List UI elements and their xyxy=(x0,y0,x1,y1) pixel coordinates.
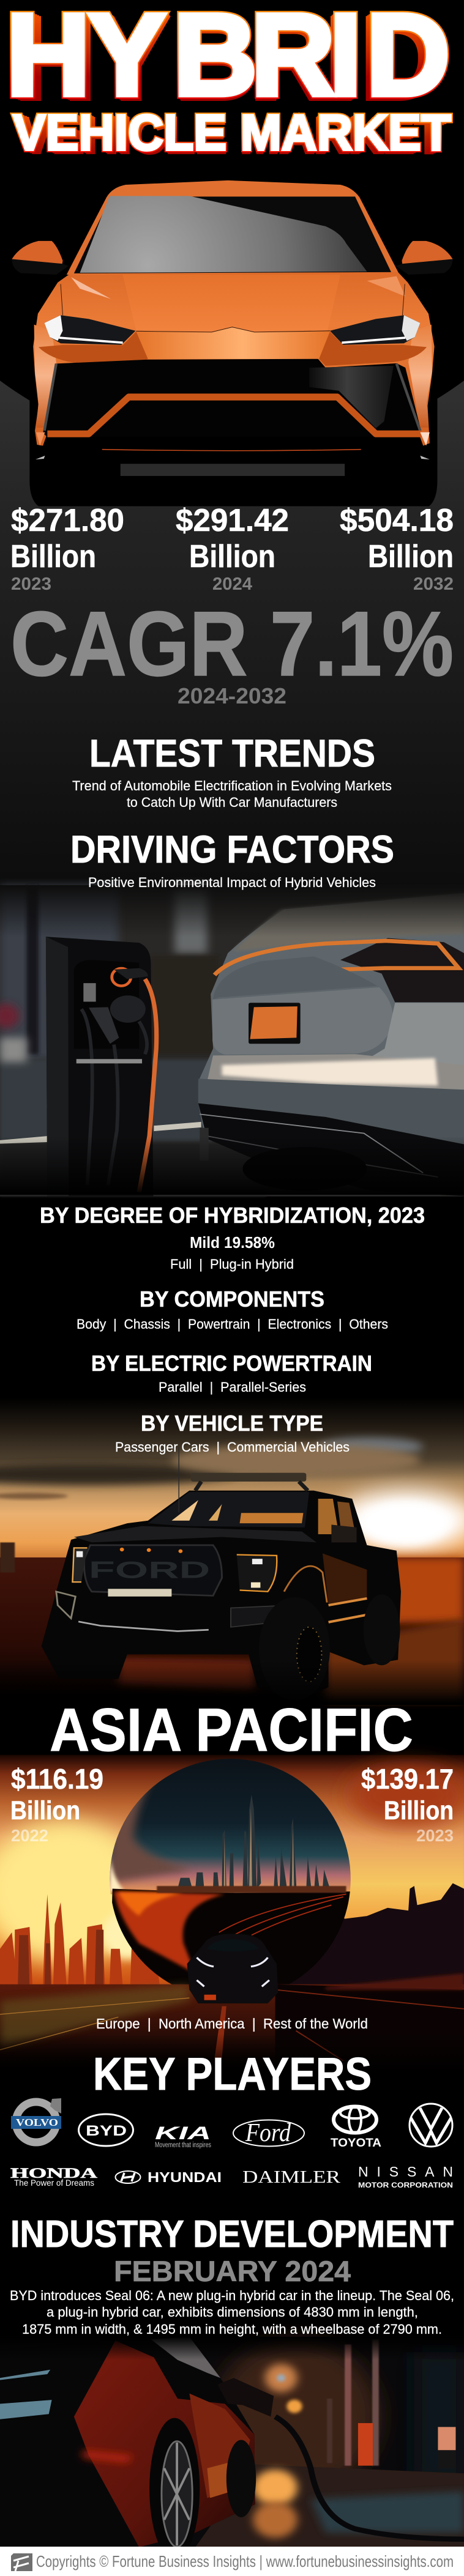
stat: 2024 market size: $291.42 xyxy=(176,503,289,538)
stat: 2023 market size: Billion xyxy=(10,539,96,574)
heading: by electric powertrain: BY ELECTRIC POWERTRAIN xyxy=(91,1351,372,1376)
photo: hybrid car at charging station xyxy=(0,885,464,1197)
logo: Volvo: VOLVO xyxy=(16,2117,58,2128)
stat: 2032 market size: 2032 xyxy=(413,574,454,594)
logo: Honda xyxy=(10,2166,98,2188)
stat: 2024 market size xyxy=(176,503,289,594)
logo: Kia: Movement that inspires xyxy=(155,2142,211,2149)
logo: Daimler: DAIMLER xyxy=(242,2167,341,2187)
text: other regions: Europe | North America | Rest of the World xyxy=(96,2016,368,2032)
heading: by components: BY COMPONENTS xyxy=(140,1286,324,1312)
text: driving factors body: Positive Environmental Impact of Hybrid Vehicles xyxy=(88,875,376,890)
logo: BYD: BYD xyxy=(86,2123,127,2139)
logo: Toyota xyxy=(331,2106,381,2150)
text: mild share: Mild 19.58% xyxy=(190,1233,275,1252)
stat: Asia Pacific 2022 xyxy=(10,1763,103,1845)
title: VEHICLE MARKET: VEHICLE MARKET xyxy=(13,104,451,161)
stat: Asia Pacific 2022: 2022 xyxy=(11,1826,48,1845)
heading: key players: KEY PLAYERS xyxy=(93,2048,372,2099)
logo: Honda: The Power of Dreams xyxy=(14,2178,94,2188)
logo: Hyundai xyxy=(115,2169,222,2185)
stat: 2023 market size: 2023 xyxy=(11,574,51,594)
logo: Kia xyxy=(155,2123,211,2149)
logo: Nissan xyxy=(358,2164,453,2189)
text: development details: a plug-in hybrid car, exhibits dimensions of 4830 mm in length, xyxy=(47,2304,418,2320)
stat: Asia Pacific 2023: Billion xyxy=(384,1796,454,1825)
title: VEHICLE MARKET: VEHICLE MARKET xyxy=(13,104,451,161)
logo: BYD xyxy=(78,2114,133,2146)
logo: Toyota: TOYOTA xyxy=(331,2137,381,2150)
stat: 2032 market size: Billion xyxy=(368,539,454,574)
stat: 2023 market size: $271.80 xyxy=(11,503,124,538)
logo: Ford: Ford xyxy=(245,2119,291,2147)
text: development details: 1875 mm in width, & 1495 mm in height, with a wheelbase of 2790 mm. xyxy=(22,2322,442,2337)
title: VEHICLE MARKET: VEHICLE MARKET xyxy=(21,108,443,164)
photo: pickup truck at sunset xyxy=(0,1398,464,1705)
stat: 2032 market size xyxy=(340,503,454,594)
text: other hybridization types: Full | Plug-in Hybrid xyxy=(170,1256,294,1272)
stat: 2023 market size xyxy=(10,503,124,594)
photo: pickup truck at sunset: FORD xyxy=(89,1556,210,1583)
stat: Asia Pacific 2023: $139.17 xyxy=(361,1763,454,1795)
logo: Honda: HONDA xyxy=(10,2166,98,2181)
text: latest trends body: Trend of Automobile Electrification in Evolving Markets xyxy=(72,778,392,793)
heading: development date: FEBRUARY 2024 xyxy=(114,2255,351,2287)
title: VEHICLE MARKET: VEHICLE MARKET xyxy=(18,107,446,163)
heading: Asia Pacific: ASIA PACIFIC xyxy=(50,1696,413,1764)
text: powertrain list: Parallel | Parallel-Series xyxy=(159,1379,306,1395)
logo: Kia: KIA xyxy=(155,2123,211,2144)
text: latest trends body xyxy=(72,778,392,810)
heading: latest trends: LATEST TRENDS xyxy=(89,732,375,775)
text: components list: Body | Chassis | Powertrain | Electronics | Others xyxy=(77,1316,388,1332)
title: VEHICLE MARKET: VEHICLE MARKET xyxy=(13,104,451,161)
illustration: orange SUV front view xyxy=(12,180,453,507)
logo: Nissan: MOTOR CORPORATION xyxy=(358,2181,453,2189)
text: development details: BYD introduces Seal 06: A new plug-in hybrid car in the lineup. The Seal 06, xyxy=(10,2288,454,2303)
stat: Asia Pacific 2022: $116.19 xyxy=(11,1763,103,1795)
stat: 2024 market size: 2024 xyxy=(212,574,252,594)
panel: dark gradient backdrop with black arc xyxy=(0,0,464,893)
text: development details xyxy=(10,2288,454,2337)
text: latest trends body: to Catch Up With Car Manufacturers xyxy=(127,795,337,810)
text: vehicle type list: Passenger Cars | Commercial Vehicles xyxy=(115,1439,350,1455)
stat: Asia Pacific 2023: 2023 xyxy=(416,1826,454,1845)
heading: driving factors: DRIVING FACTORS xyxy=(70,828,394,871)
footer: copyright bar xyxy=(0,2547,464,2576)
logo: Hyundai: HYUNDAI xyxy=(148,2169,222,2185)
title: VEHICLE MARKET: VEHICLE MARKET xyxy=(16,106,448,162)
logo: Volkswagen xyxy=(410,2104,452,2147)
stat: CAGR period: 2024-2032 xyxy=(178,683,286,708)
photo: futuristic city planet at sunset xyxy=(0,1755,464,2074)
logo: Nissan: NISSAN xyxy=(358,2164,453,2180)
heading: by degree of hybridization: BY DEGREE OF HYBRIDIZATION, 2023 xyxy=(40,1203,425,1228)
icon: Fortune Business Insights logo xyxy=(11,2553,32,2571)
photo: red car refuelling at night xyxy=(0,2337,464,2560)
stat: 2024 market size: Billion xyxy=(189,539,275,574)
stat: Asia Pacific 2022: Billion xyxy=(10,1796,80,1825)
stat: Asia Pacific 2023 xyxy=(361,1763,454,1845)
heading: by vehicle type: BY VEHICLE TYPE xyxy=(141,1411,323,1436)
logo: Volvo xyxy=(11,2098,61,2142)
stat: 2032 market size: $504.18 xyxy=(340,503,454,538)
